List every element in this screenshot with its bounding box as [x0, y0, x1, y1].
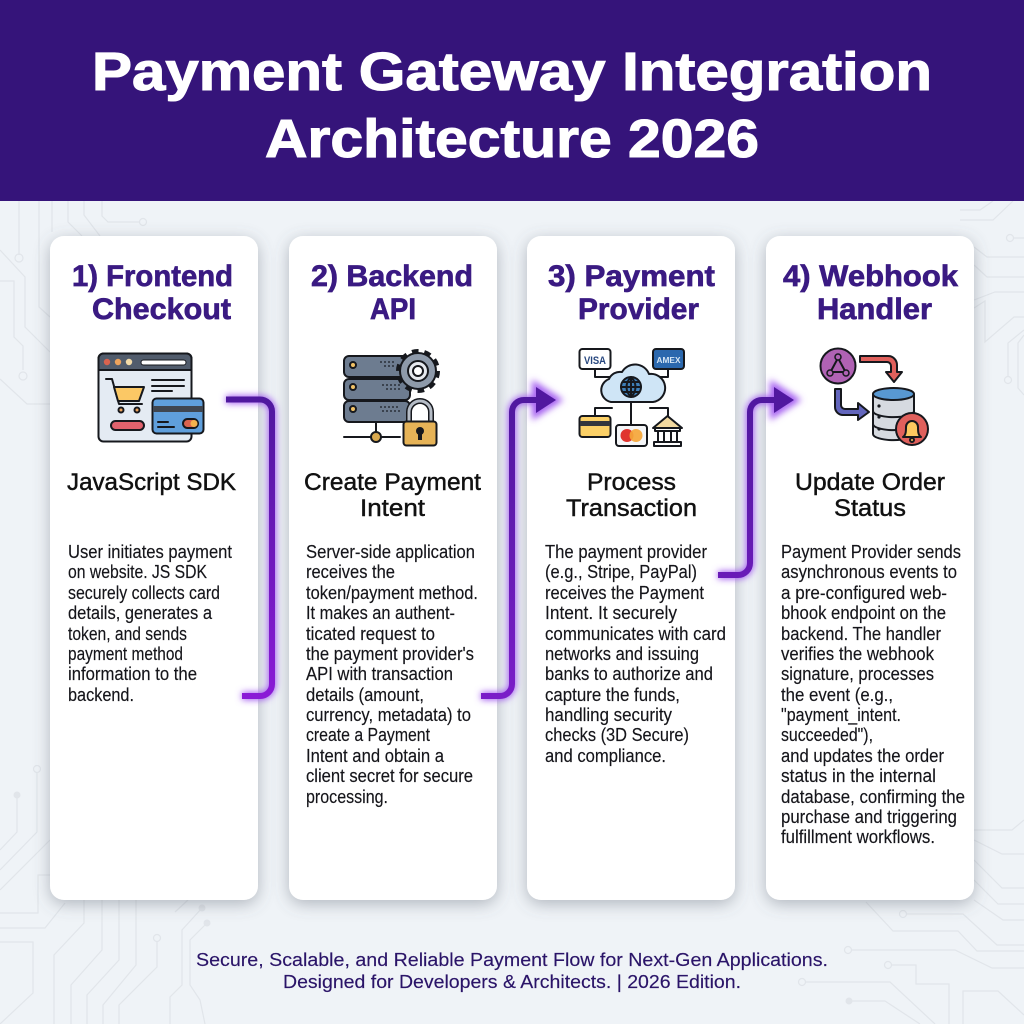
body text: (e.g., Stripe, PayPal) [545, 562, 697, 582]
card background [766, 236, 974, 900]
body text: a pre-configured web- [781, 583, 947, 603]
arrow: provider to webhook [718, 387, 794, 575]
body text [781, 542, 965, 847]
body text: Server-side application [306, 542, 475, 562]
body text: asynchronous events to [781, 562, 957, 582]
body text: client secret for secure [306, 766, 473, 786]
panel: frontend checkout [50, 236, 258, 900]
subheading: Create Payment Intent [304, 469, 481, 522]
body text: details, generates a [68, 603, 213, 623]
icon: cloud connected to card networks and bank [580, 349, 684, 446]
body text: receives the [306, 562, 395, 582]
body text: purchase and triggering [781, 807, 957, 827]
body text: payment method [68, 644, 183, 664]
body text: ticated request to [306, 624, 435, 644]
heading: 4) Webhook Handler: Handler [817, 293, 932, 326]
body text: Payment Provider sends [781, 542, 961, 562]
heading: 4) Webhook Handler [783, 260, 958, 326]
subheading: Process Transaction: Process [587, 469, 676, 496]
heading: 1) Frontend Checkout: 1) Frontend [72, 260, 233, 293]
body text: securely collects card [68, 583, 220, 603]
body text: API with transaction [306, 664, 453, 684]
body text: token/payment method. [306, 583, 478, 603]
title: Payment Gateway Integration [92, 42, 932, 102]
heading: 3) Payment Provider: Provider [578, 293, 699, 326]
subheading: Update Order Status: Status [834, 495, 906, 522]
body text [306, 542, 478, 807]
body text: database, confirming the [781, 787, 965, 807]
icon: servers, gear and padlock [344, 353, 436, 446]
body text: capture the funds, [545, 685, 680, 705]
body text: information to the [68, 664, 197, 684]
icon: webhook, arrows, database and bell [820, 348, 928, 445]
subheading: Update Order Status [795, 469, 945, 522]
body text: backend. [68, 685, 134, 705]
heading: 2) Backend API: 2) Backend [311, 260, 473, 293]
heading: 3) Payment Provider: 3) Payment [548, 260, 715, 293]
body text: on website. JS SDK [68, 562, 207, 582]
heading: 3) Payment Provider [548, 260, 715, 326]
panel: backend api [289, 236, 497, 900]
card background [50, 236, 258, 900]
footer tagline: Secure, Scalable, and Reliable Payment Flow for Next-Gen Applications. [196, 949, 828, 970]
icon: cloud connected to card networks and bank: VISA [584, 355, 606, 367]
card background [289, 236, 497, 900]
heading: 2) Backend API [311, 260, 473, 326]
body text: networks and issuing [545, 644, 699, 664]
subheading: Process Transaction [566, 469, 697, 522]
subheading: Update Order Status: Update Order [795, 469, 945, 496]
body text: Intent. It securely [545, 603, 677, 623]
subheading: JavaScript SDK: JavaScript SDK [67, 469, 236, 496]
body text: handling security [545, 705, 672, 725]
body text: and updates the order [781, 746, 944, 766]
body text: token, and sends [68, 624, 187, 644]
heading: 1) Frontend Checkout: Checkout [92, 293, 231, 326]
footer tagline: Designed for Developers & Architects. | 2026 Edition. [283, 971, 741, 992]
subheading: Create Payment Intent: Intent [360, 495, 425, 522]
body text: backend. The handler [781, 624, 941, 644]
body text: banks to authorize and [545, 664, 713, 684]
heading: 2) Backend API: API [370, 293, 416, 326]
subheading: Create Payment Intent: Create Payment [304, 469, 481, 496]
body text: create a Payment [306, 725, 430, 745]
panel: webhook handler [766, 236, 974, 900]
arrow: frontend to backend [226, 400, 272, 696]
subheading: Process Transaction: Transaction [566, 495, 697, 522]
panel: payment provider [527, 236, 735, 900]
body text: status in the internal [781, 766, 936, 786]
body text: and compliance. [545, 746, 666, 766]
icon: browser with cart and credit card [98, 354, 204, 442]
body text: fulfillment workflows. [781, 827, 935, 847]
body text: succeeded"), [781, 725, 873, 745]
title: Architecture 2026 [265, 109, 759, 169]
body text [68, 542, 232, 705]
footer tagline [196, 949, 828, 992]
title [92, 42, 932, 169]
body text: communicates with card [545, 624, 726, 644]
body text: checks (3D Secure) [545, 725, 689, 745]
body text: User initiates payment [68, 542, 232, 562]
body text: receives the Payment [545, 583, 704, 603]
body text: the event (e.g., [781, 685, 893, 705]
heading: 4) Webhook Handler: 4) Webhook [783, 260, 958, 293]
body text: verifies the webhook [781, 644, 935, 664]
body text: The payment provider [545, 542, 707, 562]
header banner [0, 0, 1024, 201]
body text: bhook endpoint on the [781, 603, 946, 623]
icon: cloud connected to card networks and bank: AMEX [656, 356, 681, 365]
heading: 1) Frontend Checkout [72, 260, 233, 326]
body text: signature, processes [781, 664, 934, 684]
body text: the payment provider's [306, 644, 474, 664]
arrow: backend to provider [481, 387, 556, 696]
body text [545, 542, 726, 766]
body text: processing. [306, 787, 388, 807]
body text: "payment_intent. [781, 705, 901, 726]
card background [527, 236, 735, 900]
body text: Intent and obtain a [306, 746, 445, 766]
body text: It makes an authent- [306, 603, 455, 623]
body text: details (amount, [306, 685, 424, 705]
body text: currency, metadata) to [306, 705, 471, 725]
